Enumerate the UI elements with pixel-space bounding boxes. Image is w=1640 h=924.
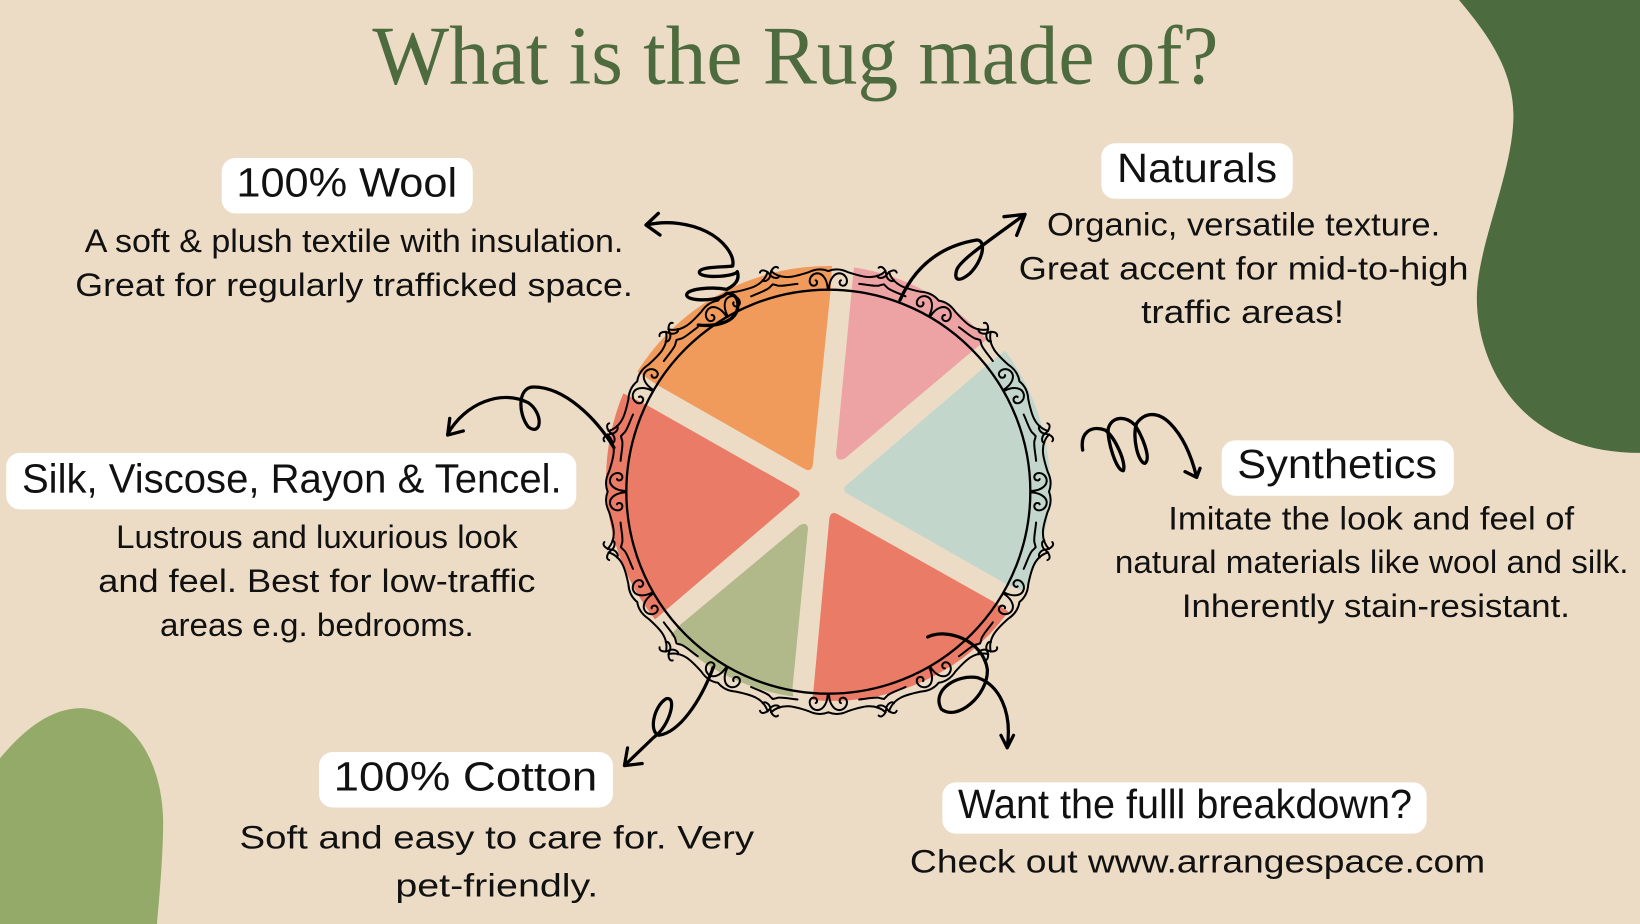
text: website: Check out www.arrangespace.com	[910, 843, 1485, 879]
text: synthetics description: Inherently stain-resistant.	[1182, 588, 1570, 624]
text: naturals description: traffic areas!	[1141, 294, 1344, 330]
text: synthetics description	[1115, 500, 1628, 624]
heading: Silk, Viscose, Rayon & Tencel.: Silk, Viscose, Rayon & Tencel.	[22, 456, 562, 502]
text: synthetics description: natural materials like wool and silk.	[1115, 544, 1628, 580]
heading: 100% Wool	[222, 158, 473, 213]
heading: 100% Cotton: 100% Cotton	[334, 754, 597, 800]
arrow: synthetics	[1082, 415, 1200, 477]
text: naturals description: Organic, versatile texture.	[1047, 206, 1440, 242]
blob: bottom left light green	[0, 708, 163, 924]
blob: top right dark green	[1459, 0, 1640, 453]
wedge: red synthetics lower	[812, 513, 1008, 701]
arrow: naturals	[900, 214, 1025, 300]
text: naturals description: Great accent for mid-to-high	[1019, 250, 1468, 286]
heading: 100% Cotton	[319, 752, 613, 807]
text: wool description: A soft & plush textile with insulation.	[85, 223, 623, 259]
heading: Want the fulll breakdown?: Want the fulll breakdown?	[958, 781, 1412, 827]
panel: full breakdown	[910, 781, 1485, 879]
text: silk description: and feel. Best for low-traffic	[98, 563, 536, 599]
text: cotton description: Soft and easy to care for. Very	[240, 819, 755, 855]
rug wheel	[588, 213, 1068, 732]
arrow: wool	[646, 213, 738, 325]
text: silk description: Lustrous and luxurious look	[116, 519, 519, 555]
wedge: green cotton	[671, 524, 808, 697]
text: silk description	[98, 519, 536, 643]
wedge: red silk	[606, 393, 800, 619]
panel: silk	[6, 453, 576, 643]
heading: 100% Wool: 100% Wool	[236, 160, 457, 206]
text: cotton description: pet-friendly.	[395, 867, 598, 903]
panel: cotton	[240, 752, 755, 903]
text: naturals description	[1019, 206, 1468, 330]
heading: Synthetics: Synthetics	[1237, 441, 1437, 487]
wedge: orange wool	[637, 266, 832, 470]
arrow: silk	[448, 387, 614, 448]
wedge: teal synthetics	[844, 351, 1050, 592]
text: wool description: Great for regularly trafficked space.	[75, 267, 633, 303]
wedge: pink naturals	[836, 267, 987, 460]
heading: Synthetics	[1222, 440, 1454, 496]
text: cotton description	[240, 819, 755, 903]
heading: Naturals	[1101, 143, 1293, 199]
title: What is the Rug made of?	[372, 10, 1218, 103]
panel: wool	[75, 158, 633, 303]
panel: synthetics	[1115, 440, 1628, 624]
text: silk description: areas e.g. bedrooms.	[160, 607, 474, 643]
panel: naturals	[1019, 143, 1468, 330]
arrow: breakdown	[928, 634, 1013, 748]
heading: Naturals: Naturals	[1117, 145, 1277, 191]
ornate frame	[588, 252, 1068, 732]
arrow: cotton	[624, 667, 713, 766]
text: synthetics description: Imitate the look and feel of	[1168, 500, 1575, 536]
text: wool description	[75, 223, 633, 303]
